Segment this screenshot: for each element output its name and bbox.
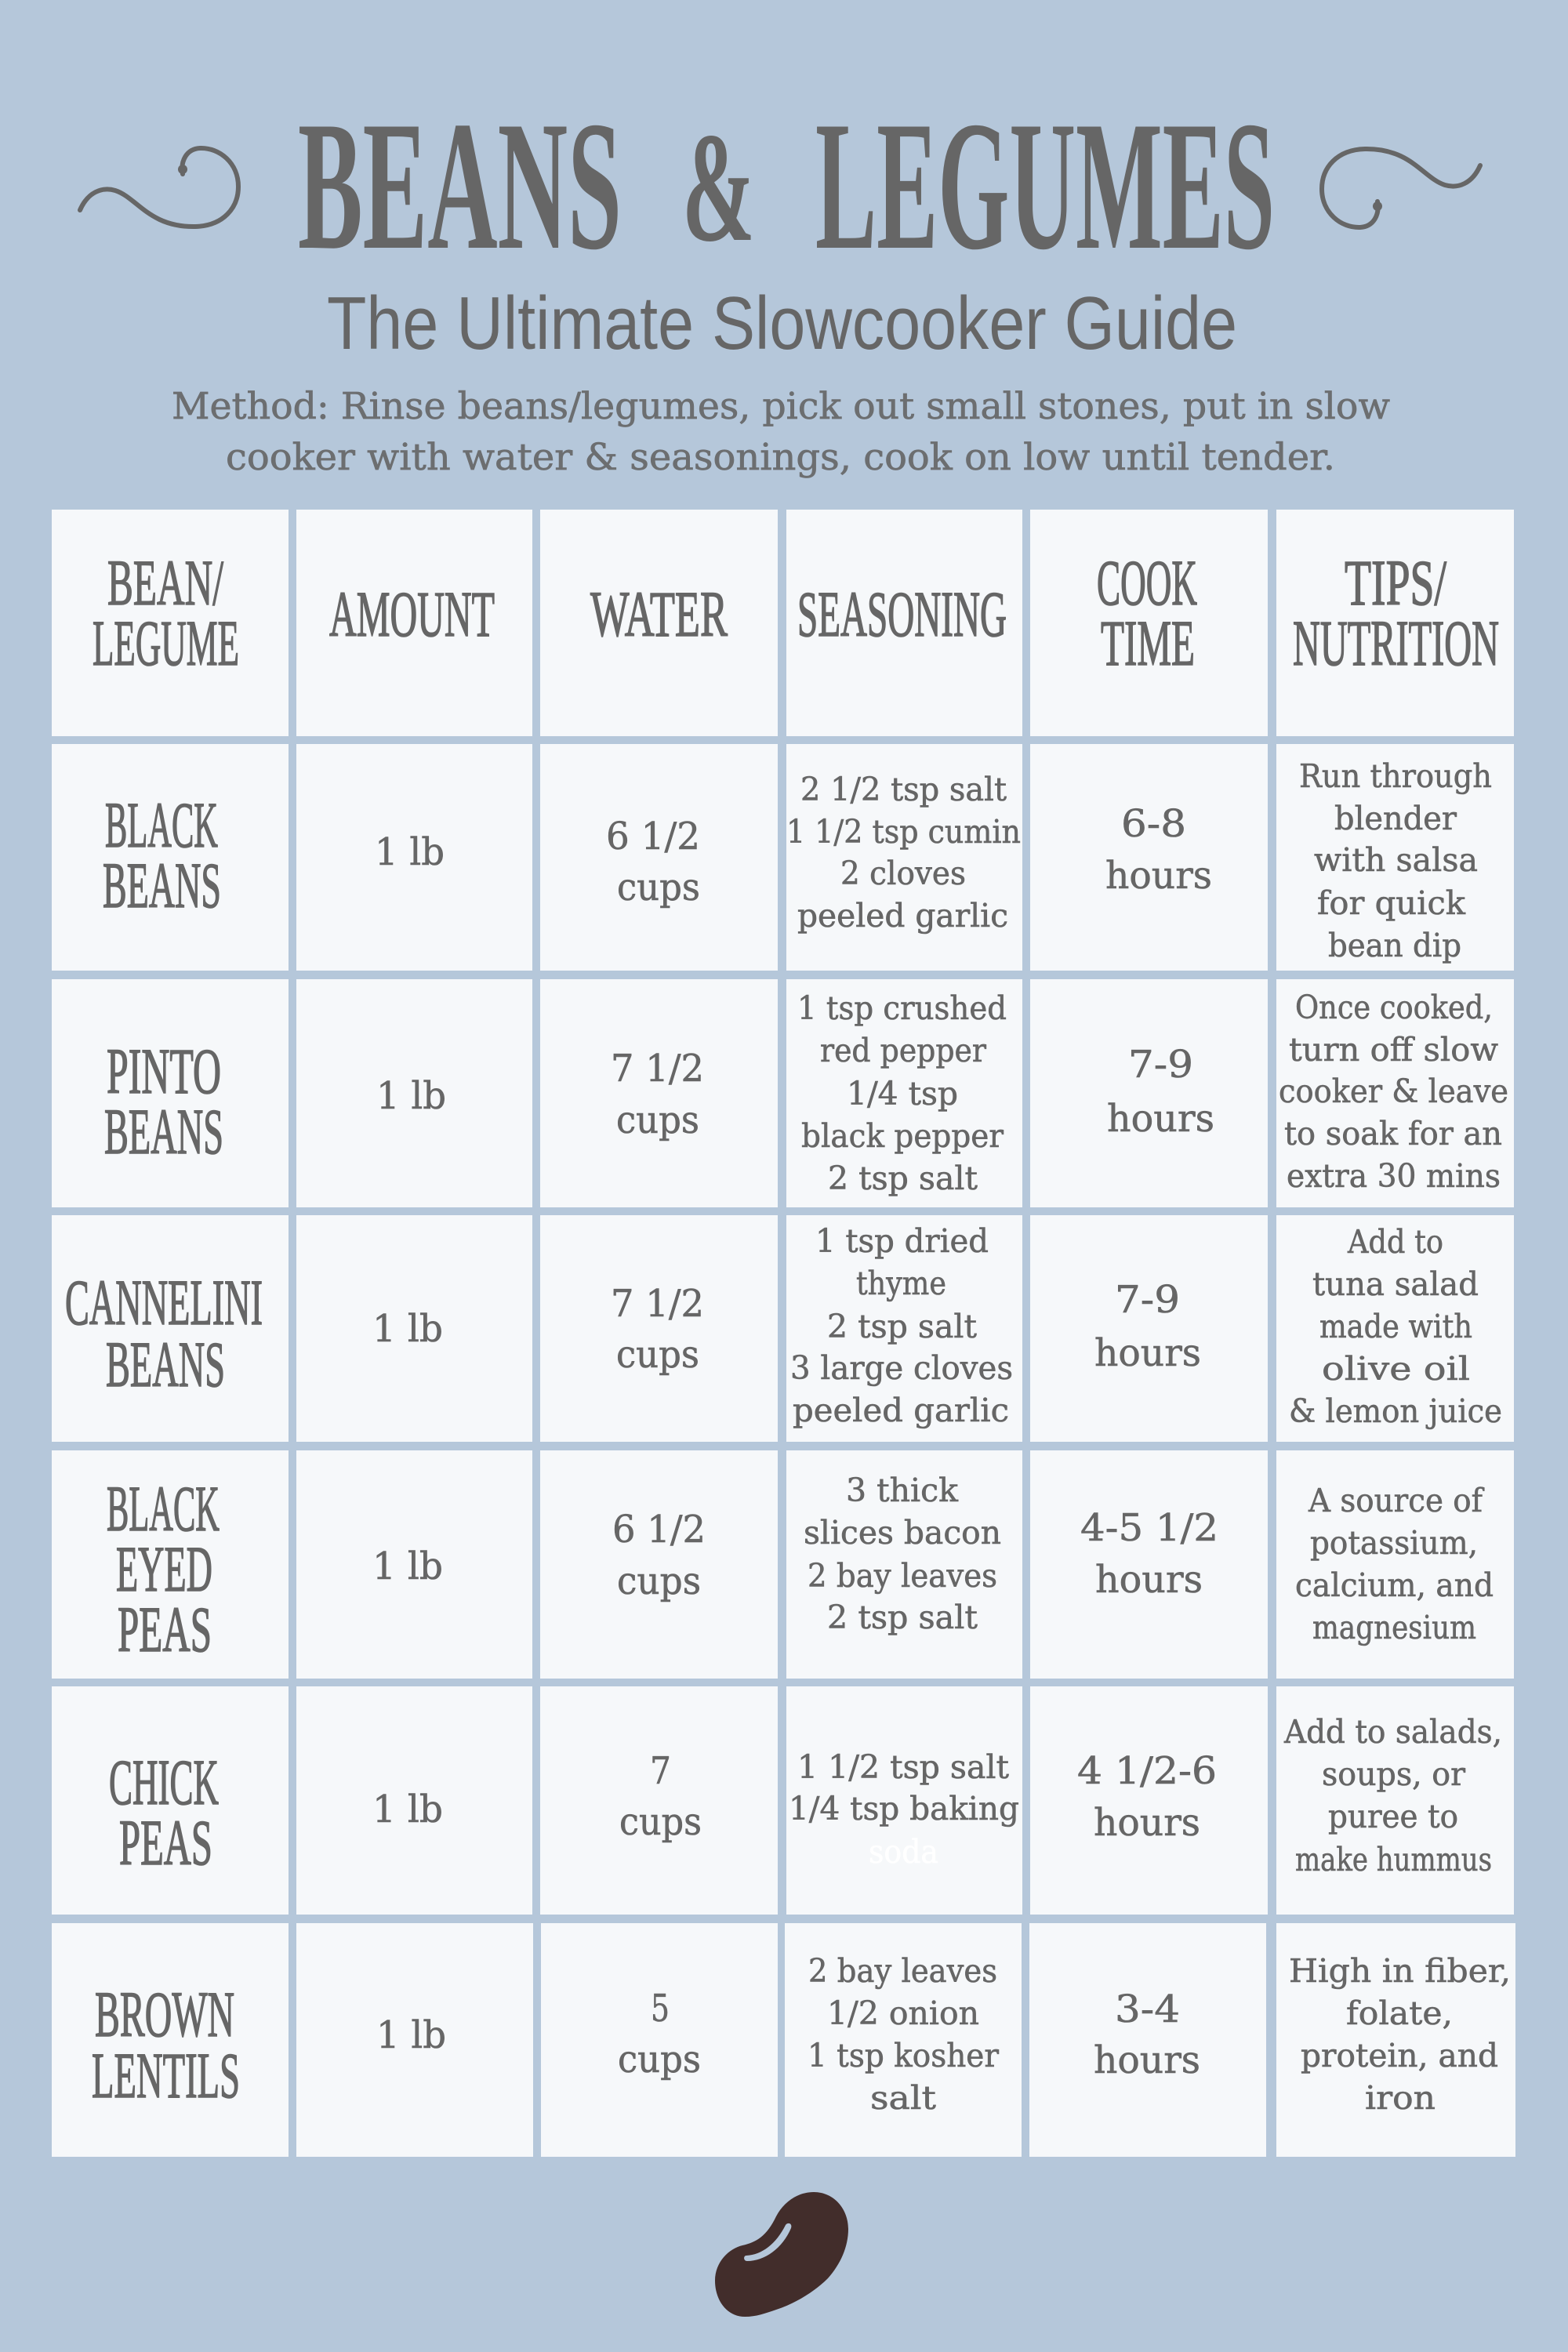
- cook time: brown lentils: [1029, 1923, 1266, 2157]
- water: black eyed peas: cups: [617, 1559, 701, 1603]
- seasoning: cannelini beans: thyme: [856, 1265, 946, 1302]
- name: black beans: BLACK: [105, 789, 218, 861]
- tips: pinto beans: [1276, 979, 1514, 1207]
- seasoning: chick peas: 1/4 tsp baking: [789, 1790, 1019, 1828]
- header: cook time: TIME: [1101, 607, 1195, 679]
- cook time: black beans: [1030, 744, 1268, 971]
- tips: black eyed peas: [1276, 1450, 1514, 1679]
- name: brown lentils: BROWN: [95, 1978, 234, 2050]
- title: BEANS: [298, 84, 622, 289]
- water: pinto beans: 7 1/2: [611, 1047, 704, 1091]
- seasoning: chick peas: 1 1/2 tsp salt: [797, 1748, 1010, 1786]
- seasoning: brown lentils: 1 tsp kosher: [808, 2037, 999, 2074]
- seasoning: chick peas: [786, 1686, 1022, 1915]
- amount: black beans: [296, 744, 532, 971]
- name: black eyed peas: PEAS: [118, 1593, 212, 1665]
- panel: black eyed peas row: [52, 1450, 1514, 1679]
- cook time: chick peas: hours: [1094, 1801, 1200, 1845]
- seasoning: pinto beans: 1/4 tsp: [847, 1075, 958, 1112]
- method text: Method: Rinse beans/legumes, pick out small stones, put in slow: [172, 385, 1390, 428]
- seasoning: pinto beans: red pepper: [820, 1032, 986, 1069]
- header: water: WATER: [590, 578, 728, 650]
- name: black beans: [52, 744, 289, 971]
- tips: chick peas: soups, or: [1322, 1755, 1465, 1793]
- tips: black beans: with salsa: [1314, 841, 1478, 879]
- cook time: brown lentils: hours: [1094, 2038, 1200, 2082]
- tips: brown lentils: iron: [1365, 2079, 1436, 2117]
- tips: pinto beans: turn off slow: [1289, 1031, 1498, 1069]
- name: pinto beans: PINTO: [107, 1035, 221, 1107]
- tips: black beans: Run through: [1299, 757, 1492, 795]
- amount: black beans: 1 lb: [375, 830, 445, 874]
- tips: black eyed peas: potassium,: [1310, 1524, 1478, 1562]
- water: black beans: 6 1/2: [606, 815, 700, 858]
- tips: pinto beans: to soak for an: [1284, 1115, 1502, 1152]
- tips: cannelini beans: olive oil: [1322, 1350, 1470, 1388]
- amount: cannelini beans: [296, 1215, 532, 1442]
- water: brown lentils: [541, 1923, 778, 2157]
- seasoning: black eyed peas: slices bacon: [804, 1514, 1001, 1552]
- seasoning: black beans: 2 1/2 tsp salt: [800, 771, 1007, 808]
- water: black eyed peas: 6 1/2: [612, 1508, 706, 1552]
- water: black eyed peas: [540, 1450, 778, 1679]
- panel: cannelini beans row: [52, 1215, 1514, 1442]
- tips: chick peas: make hummus: [1295, 1841, 1492, 1878]
- name: pinto beans: [52, 979, 289, 1207]
- panel: pinto beans row: [52, 979, 1514, 1207]
- tips: brown lentils: folate,: [1346, 1994, 1453, 2032]
- seasoning: black eyed peas: 2 bay leaves: [808, 1557, 997, 1595]
- seasoning: pinto beans: [786, 979, 1022, 1207]
- tips: black eyed peas: A source of: [1308, 1482, 1485, 1519]
- name: black eyed peas: [52, 1450, 289, 1679]
- tips: black beans: bean dip: [1328, 927, 1461, 964]
- seasoning: black eyed peas: 3 thick: [846, 1472, 959, 1509]
- seasoning: black beans: 2 cloves: [840, 855, 966, 892]
- seasoning: brown lentils: 1/2 onion: [827, 1994, 979, 2032]
- cook time: black beans: 6-8: [1121, 802, 1186, 846]
- tips: black beans: [1276, 744, 1514, 971]
- header: bean/legume: BEAN/: [107, 546, 224, 619]
- cook time: pinto beans: [1030, 979, 1268, 1207]
- water: chick peas: [540, 1686, 778, 1915]
- header: seasoning: SEASONING: [797, 578, 1007, 650]
- name: black eyed peas: BLACK: [107, 1472, 220, 1544]
- amount: cannelini beans: 1 lb: [372, 1307, 443, 1351]
- seasoning: black beans: 1 1/2 tsp cumin: [786, 813, 1021, 851]
- seasoning: brown lentils: 2 bay leaves: [808, 1952, 997, 1990]
- cook time: pinto beans: 7-9: [1128, 1043, 1193, 1087]
- seasoning: black beans: [786, 744, 1022, 971]
- cook time: brown lentils: 3-4: [1115, 1987, 1180, 2031]
- header: cook time: COOK: [1097, 546, 1197, 619]
- header: bean/legume: LEGUME: [93, 607, 239, 679]
- tips: black eyed peas: calcium, and: [1295, 1566, 1494, 1604]
- name: pinto beans: BEANS: [104, 1095, 223, 1167]
- tips: chick peas: puree to: [1328, 1798, 1458, 1835]
- water: brown lentils: cups: [618, 2038, 701, 2082]
- header: water: [540, 510, 778, 736]
- name: cannelini beans: BEANS: [106, 1328, 225, 1400]
- tips: pinto beans: extra 30 mins: [1287, 1157, 1501, 1195]
- cook time: black beans: hours: [1105, 854, 1212, 898]
- water: black beans: [540, 744, 778, 971]
- name: brown lentils: [52, 1923, 289, 2157]
- title: [298, 84, 1275, 289]
- water: pinto beans: cups: [616, 1098, 699, 1142]
- seasoning: black eyed peas: 2 tsp salt: [827, 1599, 978, 1636]
- amount: black eyed peas: [296, 1450, 532, 1679]
- cook time: black eyed peas: hours: [1095, 1558, 1203, 1602]
- seasoning: brown lentils: salt: [870, 2079, 937, 2117]
- seasoning: black beans: peeled garlic: [797, 897, 1008, 935]
- tips: black eyed peas: magnesium: [1312, 1609, 1476, 1646]
- cook time: cannelini beans: 7-9: [1115, 1278, 1180, 1322]
- panel: chick peas row: [52, 1686, 1514, 1915]
- cook time: cannelini beans: [1030, 1215, 1268, 1442]
- header: tips/nutrition: [1276, 510, 1514, 736]
- seasoning: cannelini beans: 2 tsp salt: [827, 1308, 978, 1345]
- name: chick peas: PEAS: [119, 1806, 212, 1878]
- subtitle: The Ultimate Slowcooker Guide: [327, 281, 1237, 365]
- header: cook time: [1030, 510, 1268, 736]
- water: chick peas: 7: [650, 1749, 671, 1793]
- panel: black beans row: [52, 744, 1514, 971]
- seasoning: chick peas: soda: [869, 1833, 938, 1871]
- seasoning: cannelini beans: peeled garlic: [793, 1392, 1009, 1429]
- amount: black eyed peas: 1 lb: [372, 1544, 443, 1588]
- name: chick peas: CHICK: [109, 1746, 219, 1818]
- header: amount: AMOUNT: [329, 578, 495, 650]
- water: chick peas: cups: [619, 1800, 702, 1844]
- method text: cooker with water & seasonings, cook on low until tender.: [226, 436, 1335, 479]
- name: chick peas: [52, 1686, 289, 1915]
- seasoning: cannelini beans: 1 tsp dried: [815, 1222, 989, 1260]
- seasoning: cannelini beans: 3 large cloves: [790, 1349, 1013, 1387]
- cook time: black eyed peas: [1030, 1450, 1268, 1679]
- amount: chick peas: 1 lb: [372, 1788, 443, 1831]
- water: cannelini beans: [540, 1215, 778, 1442]
- panel: header row: [52, 510, 1514, 736]
- icon: left swirl: [80, 148, 238, 227]
- cook time: black eyed peas: 4-5 1/2: [1080, 1506, 1218, 1550]
- tips: cannelini beans: made with: [1319, 1308, 1472, 1345]
- tips: brown lentils: protein, and: [1301, 2037, 1498, 2074]
- name: cannelini beans: [52, 1215, 289, 1442]
- tips: cannelini beans: [1276, 1215, 1514, 1442]
- name: cannelini beans: CANNELINI: [65, 1266, 263, 1338]
- water: brown lentils: 5: [651, 1987, 670, 2031]
- cook time: cannelini beans: hours: [1094, 1331, 1201, 1375]
- tips: cannelini beans: & lemon juice: [1289, 1392, 1502, 1430]
- header: amount: [296, 510, 532, 736]
- amount: pinto beans: 1 lb: [376, 1074, 446, 1118]
- tips: cannelini beans: tuna salad: [1312, 1265, 1479, 1303]
- name: black beans: BEANS: [103, 849, 221, 921]
- seasoning: brown lentils: [785, 1923, 1022, 2157]
- tips: pinto beans: cooker & leave: [1279, 1073, 1508, 1110]
- seasoning: pinto beans: black pepper: [801, 1117, 1004, 1155]
- water: cannelini beans: cups: [616, 1333, 699, 1377]
- seasoning: cannelini beans: [786, 1215, 1022, 1442]
- cook time: chick peas: [1030, 1686, 1268, 1915]
- panel: brown lentils row: [52, 1923, 1515, 2157]
- icon: bean: [715, 2192, 848, 2317]
- cook time: pinto beans: hours: [1107, 1097, 1214, 1141]
- header: bean/legume: [52, 510, 289, 736]
- tips: brown lentils: High in fiber,: [1289, 1952, 1511, 1990]
- icon: right swirl: [1322, 149, 1480, 227]
- header: seasoning: [786, 510, 1022, 736]
- tips: chick peas: [1276, 1686, 1514, 1915]
- amount: brown lentils: [296, 1923, 533, 2157]
- tips: chick peas: Add to salads,: [1283, 1713, 1502, 1751]
- amount: brown lentils: 1 lb: [376, 2013, 446, 2057]
- water: pinto beans: [540, 979, 778, 1207]
- amount: pinto beans: [296, 979, 532, 1207]
- seasoning: black eyed peas: [786, 1450, 1022, 1679]
- water: cannelini beans: 7 1/2: [611, 1282, 704, 1326]
- amount: chick peas: [296, 1686, 532, 1915]
- name: brown lentils: LENTILS: [92, 2039, 240, 2111]
- seasoning: pinto beans: 1 tsp crushed: [797, 989, 1007, 1027]
- tips: black beans: blender: [1334, 800, 1457, 837]
- water: black beans: cups: [617, 866, 700, 909]
- tips: brown lentils: [1276, 1923, 1515, 2157]
- method text: [172, 385, 1390, 479]
- tips: black beans: for quick: [1317, 884, 1466, 922]
- cook time: chick peas: 4 1/2-6: [1077, 1749, 1217, 1793]
- tips: cannelini beans: Add to: [1347, 1223, 1443, 1261]
- tips: pinto beans: Once cooked,: [1295, 989, 1493, 1026]
- title: &: [682, 101, 755, 274]
- header: tips/nutrition: TIPS/: [1345, 546, 1447, 619]
- name: black eyed peas: EYED: [116, 1533, 212, 1605]
- seasoning: pinto beans: 2 tsp salt: [828, 1160, 978, 1197]
